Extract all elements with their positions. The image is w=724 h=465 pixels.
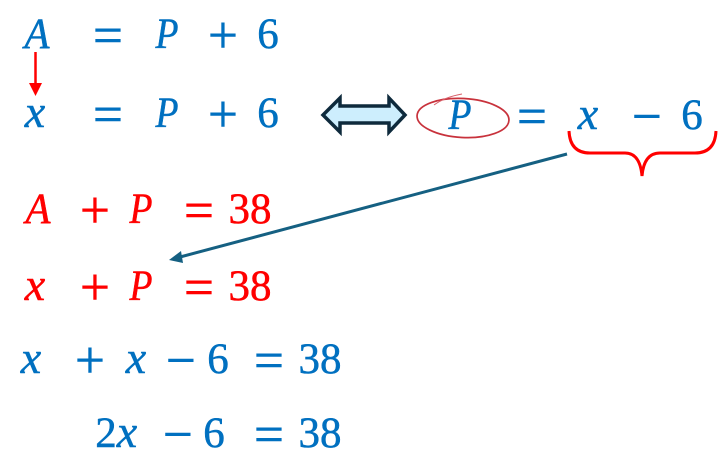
equation: A = P + 6 — [22, 7, 279, 65]
equation: x + x - 6 = 38: = — [254, 332, 284, 390]
equation: A = P + 6: A — [22, 11, 50, 58]
equation: x + x - 6 = 38: 38 — [298, 336, 342, 383]
equation: A + P = 38: P — [129, 186, 152, 233]
equation: A + P = 38 — [23, 182, 272, 240]
equation: x + P = 38: + — [80, 259, 110, 317]
arrow: substitute x - 6 for P — [169, 154, 567, 263]
equation: x + P = 38 — [24, 259, 272, 317]
icon: double-headed equivalence arrow — [323, 98, 405, 132]
equation: 2x - 6 = 38: 6 — [203, 410, 225, 457]
equation: A + P = 38: + — [80, 182, 110, 240]
equation: x = P + 6: 6 — [257, 90, 279, 137]
equation: = x - 6 — [517, 88, 703, 146]
equation: x = P + 6: + — [208, 86, 238, 144]
equation: x + P = 38: = — [184, 259, 214, 317]
equation: 2x - 6 = 38: 38 — [298, 410, 342, 457]
equation: A + P = 38: A — [23, 186, 51, 233]
equation: 2x - 6 = 38 — [95, 406, 342, 464]
equation: A + P = 38: = — [184, 182, 214, 240]
equation: x + x - 6 = 38: x — [125, 332, 147, 383]
equation: 2x - 6 = 38: 2 — [95, 410, 117, 457]
equation: x + x - 6 = 38: − — [166, 332, 196, 390]
equation: x = P + 6 — [24, 86, 279, 144]
equation: = x - 6: − — [632, 88, 662, 146]
equation: 2x - 6 = 38: − — [163, 406, 193, 464]
equation: x + P = 38: x — [24, 259, 46, 310]
equation: A = P + 6: 6 — [257, 11, 279, 58]
equation: x + x - 6 = 38: x — [20, 332, 42, 383]
equation: x + x - 6 = 38: + — [75, 332, 105, 390]
equation: A = P + 6: = — [93, 7, 123, 65]
equation: A = P + 6: + — [208, 7, 238, 65]
equation: A + P = 38: 38 — [228, 186, 272, 233]
equation: = x - 6: = — [517, 88, 547, 146]
equation: = x - 6: x — [577, 88, 599, 139]
circled variable P — [416, 92, 510, 140]
equation: x + P = 38: P — [129, 263, 152, 310]
arrow: A replaced by x — [29, 52, 42, 96]
equation: x + x - 6 = 38: 6 — [207, 336, 229, 383]
equation: 2x - 6 = 38: = — [254, 406, 284, 464]
equation: A = P + 6: P — [155, 11, 178, 58]
equation: x = P + 6: P — [155, 90, 178, 137]
circled variable P: P — [448, 92, 472, 139]
equation: = x - 6: 6 — [681, 92, 703, 139]
equation: x + P = 38: 38 — [228, 263, 272, 310]
equation: 2x - 6 = 38: x — [116, 406, 138, 457]
equation: x = P + 6: x — [24, 86, 46, 137]
equation: x = P + 6: = — [93, 86, 123, 144]
brace under x - 6 — [569, 131, 716, 176]
equation: x + x - 6 = 38 — [20, 332, 342, 390]
